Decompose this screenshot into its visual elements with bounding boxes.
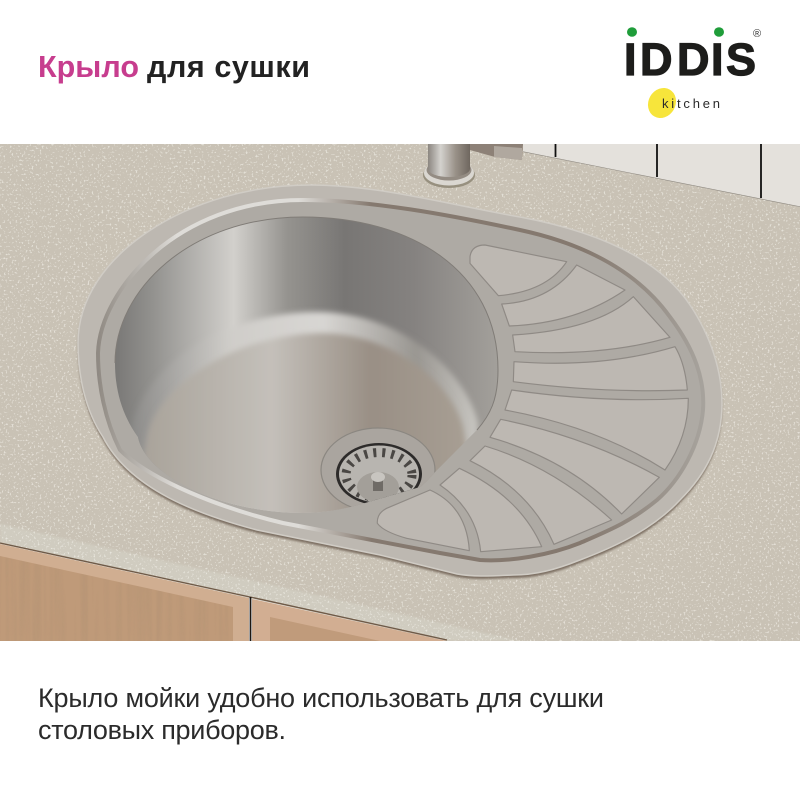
drain stopper — [357, 472, 399, 502]
backsplash tiles — [523, 144, 800, 207]
wing plate 5 — [505, 390, 688, 470]
sink rim — [78, 185, 722, 576]
bowl edge line — [115, 217, 498, 430]
logo dots — [627, 27, 724, 37]
countertop speckle — [0, 144, 800, 641]
sink rim underside shadow — [76, 328, 724, 580]
wing plate 6 — [490, 419, 659, 514]
wing plate 3 — [513, 297, 670, 353]
sink deck — [98, 200, 703, 560]
wing plate 2 — [502, 265, 625, 326]
logo: IDDIS kitchen — [624, 27, 761, 123]
countertop front edge — [0, 524, 520, 641]
logo wordmark: IDDIS — [624, 34, 756, 85]
description text: Крыло мойки удобно использовать для сушки — [38, 683, 604, 713]
registered mark: ® — [753, 28, 761, 40]
drain strainer — [336, 443, 422, 505]
kitchen label: kitchen — [662, 96, 720, 111]
left door — [0, 544, 249, 641]
wing plate 7 — [470, 446, 612, 544]
bowl wall — [115, 218, 498, 448]
wooden cabinet doors — [0, 543, 447, 641]
description text — [38, 683, 604, 745]
drying wing plates — [377, 245, 688, 552]
wing plate 9 — [377, 490, 469, 551]
countertop — [0, 144, 800, 641]
drain flange — [321, 428, 435, 512]
faucet — [423, 144, 523, 188]
title — [38, 50, 310, 84]
bowl floor rim — [130, 312, 480, 530]
description text: столовых приборов. — [38, 715, 286, 745]
sink bowl — [115, 218, 498, 513]
yellow blob — [643, 83, 681, 123]
photo: sink on countertop — [0, 144, 800, 641]
bowl floor — [144, 330, 468, 513]
right door — [252, 599, 447, 641]
wing plate 8 — [440, 468, 542, 552]
title: для сушки — [147, 50, 310, 84]
title: Крыло — [38, 50, 139, 84]
wing plate 1 — [470, 245, 567, 296]
wing plate 4 — [513, 347, 687, 391]
